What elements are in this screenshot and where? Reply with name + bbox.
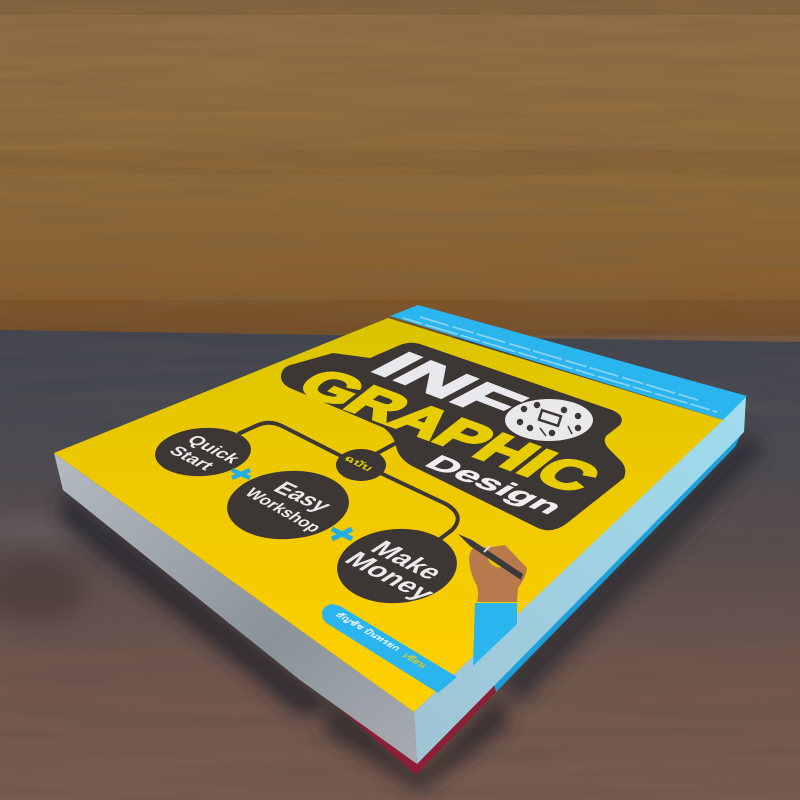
back cover red edge (337, 680, 498, 775)
sleeve (473, 603, 517, 666)
back cover blue edge (493, 430, 743, 692)
title dark shape (281, 343, 625, 530)
plus icon (232, 470, 250, 478)
book (54, 305, 747, 775)
centre node (336, 449, 386, 481)
node: Quick Start: Start (165, 443, 219, 473)
title globe icon circle (505, 399, 593, 441)
node: Easy Workshop: Easy (268, 478, 338, 515)
plus icon (332, 529, 352, 539)
title word GRAPHIC: GRAPHIC (285, 360, 613, 501)
node: Easy Workshop (225, 467, 351, 543)
wood wall background (0, 0, 800, 336)
wooden table surface (0, 330, 800, 800)
page block: left edge (54, 453, 417, 764)
node: Make Money: Make (364, 536, 451, 584)
node: Easy Workshop: Workshop (241, 485, 326, 535)
author pill (322, 604, 457, 693)
node: Make Money (335, 525, 459, 607)
title word Design: Design (418, 451, 571, 519)
node: Make Money: Money (338, 547, 443, 605)
small icons inside (518, 402, 580, 436)
author pill: เขียน (400, 652, 430, 670)
icon: hand holding pen (458, 534, 527, 602)
cover yellow panel (54, 318, 723, 712)
author pill: ธัญชัช ปันทรยก (333, 611, 404, 652)
book shadow (60, 430, 765, 792)
node: Quick Start (153, 425, 253, 479)
flow connector lines (238, 423, 458, 542)
blue band tagline text lines (403, 317, 717, 412)
cover blue band (390, 305, 747, 420)
centre node: ฉบับ (341, 454, 376, 473)
page block: right edge (414, 397, 746, 764)
node: Quick Start: Quick (183, 432, 246, 466)
title word INF: INF (356, 345, 541, 424)
